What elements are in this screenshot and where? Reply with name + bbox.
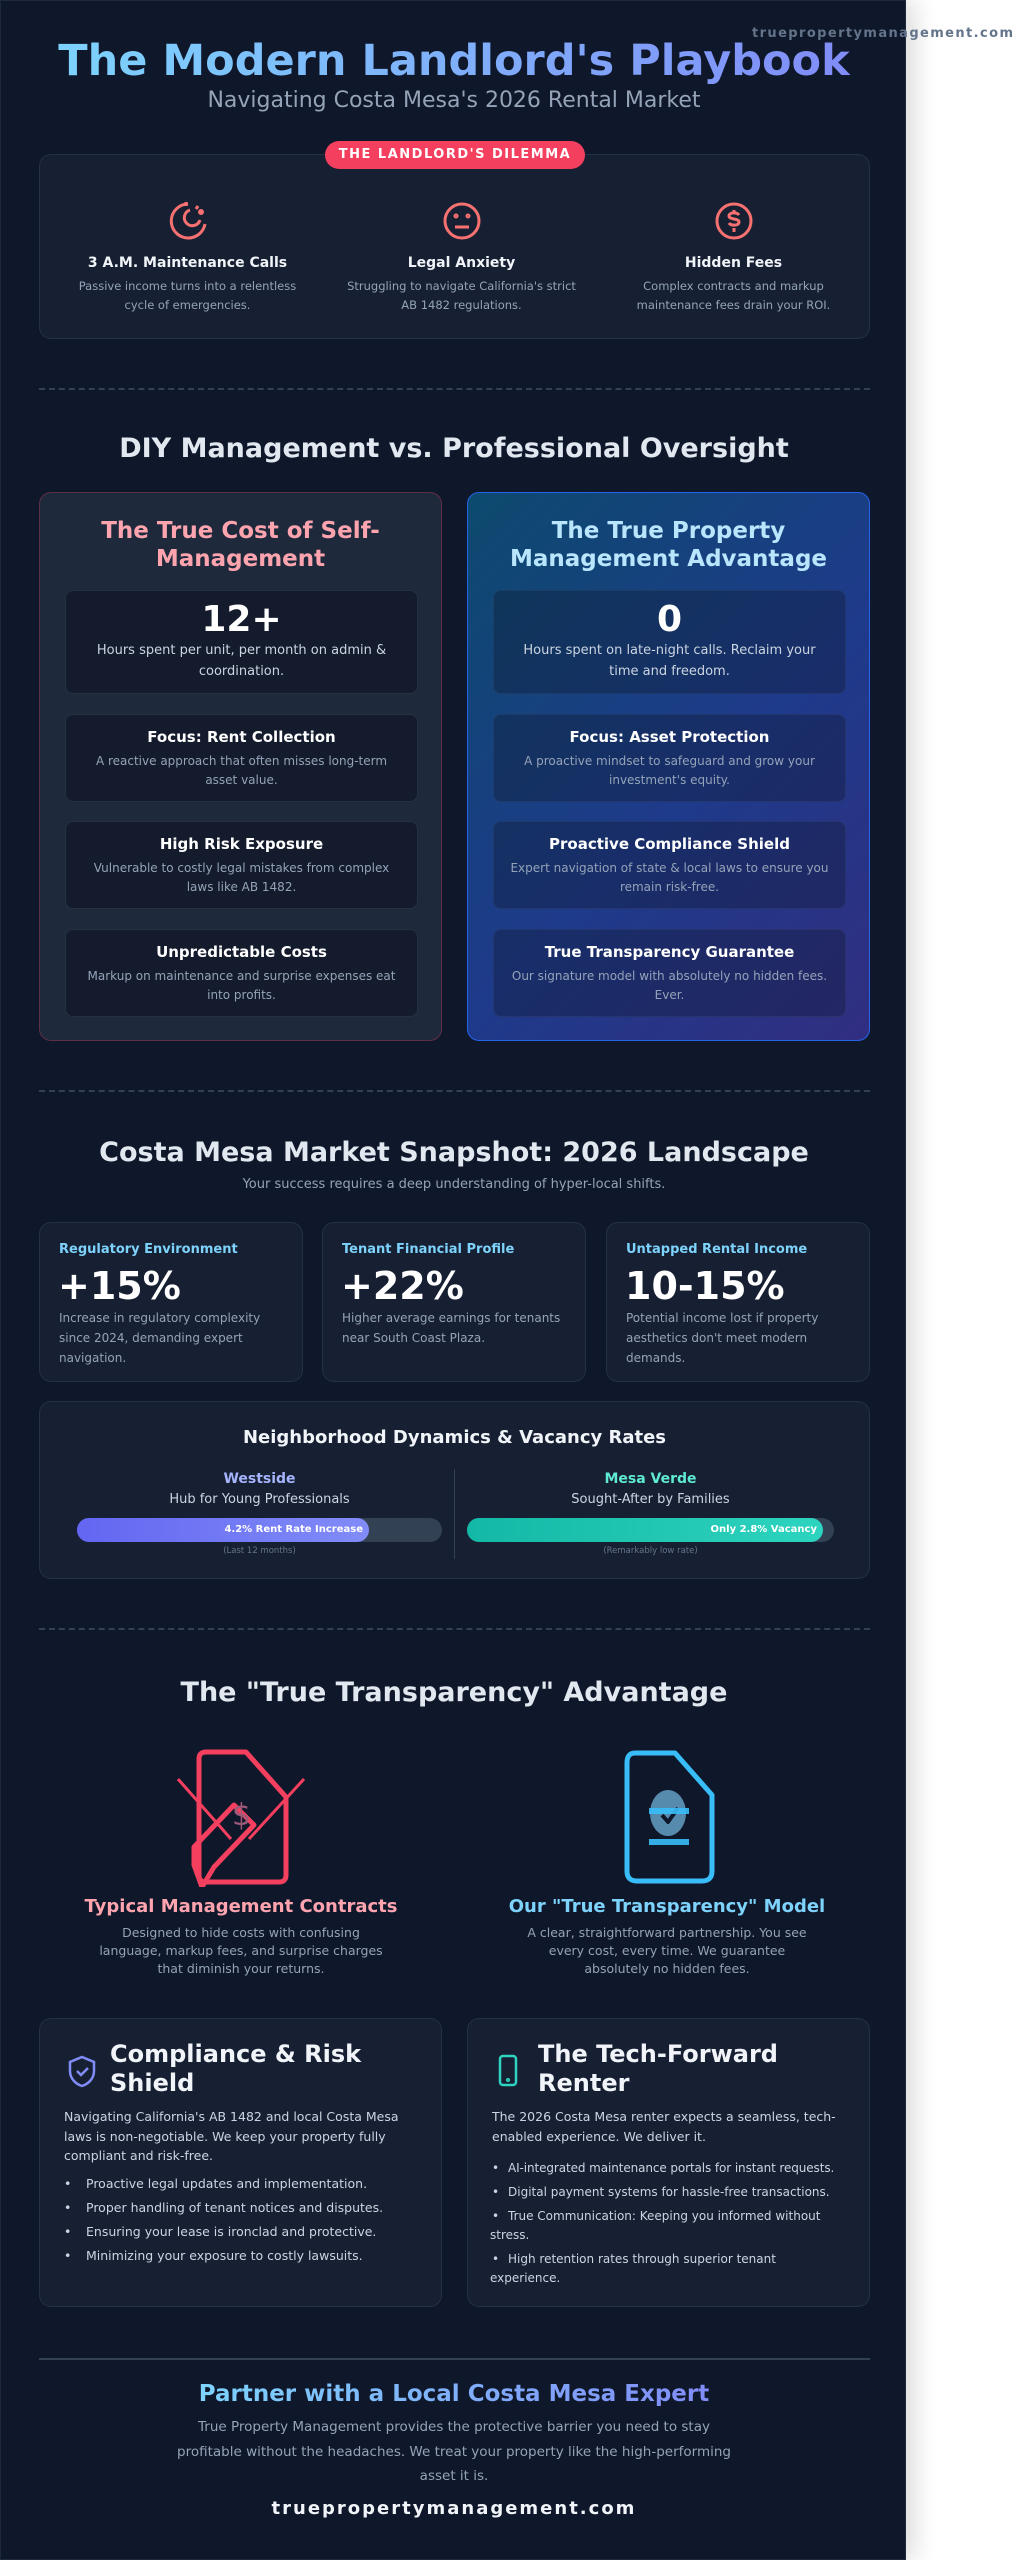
mesa verde bar: (Remarkably low rate)	[603, 1546, 698, 1556]
panel: neighborhood dynamics: Neighborhood Dynamics & Vacancy Rates	[243, 1427, 666, 1448]
panel: compliance & risk shield: Compliance & Risk	[110, 2040, 361, 2068]
item: asset protection: A proactive mindset to safeguard and grow your	[524, 754, 815, 768]
westside bar: Westside	[223, 1471, 296, 1487]
panel: compliance & risk shield: Ensuring your lease is ironclad and protective.	[86, 2224, 376, 2239]
card title: The True Property	[552, 518, 785, 544]
stat card: untapped income	[606, 1222, 870, 1382]
panel: tech-forward renter: •	[492, 2252, 499, 2266]
westside bar: (Last 12 months)	[223, 1546, 296, 1556]
stat card: regulatory: Regulatory Environment	[59, 1242, 238, 1257]
item: high risk: Vulnerable to costly legal mistakes from complex	[94, 861, 389, 875]
stat: 12+	[65, 590, 418, 694]
item: hidden fees: Hidden Fees	[685, 255, 782, 271]
card title	[510, 518, 827, 572]
item: maintenance	[79, 202, 296, 312]
panel: tech-forward renter: •	[492, 2161, 499, 2175]
block: true transparency model: A clear, straightforward partnership. You see	[527, 1925, 807, 1940]
item: transparency guarantee: Our signature model with absolutely no hidden fees.	[512, 969, 827, 983]
icon: crossed contract	[177, 1750, 305, 1887]
item: compliance shield	[493, 821, 846, 909]
stat: 0	[493, 590, 846, 694]
stat card: regulatory: +15%	[58, 1264, 181, 1308]
panel: tech-forward renter	[467, 2018, 870, 2307]
stat card: untapped income: Untapped Rental Income	[626, 1242, 807, 1257]
panel: true cost of self-management	[39, 492, 442, 1041]
mesa verde bar	[467, 1471, 834, 1556]
panel: tech-forward renter: experience.	[490, 2271, 560, 2285]
item: compliance shield: Expert navigation of state & local laws to ensure you	[510, 861, 829, 875]
panel: tech-forward renter: True Communication: Keeping you informed without stress.	[490, 2209, 820, 2242]
item: rent collection: asset value.	[205, 773, 278, 787]
panel: true property management advantage	[467, 492, 870, 1041]
panel: compliance & risk shield: •	[64, 2224, 71, 2239]
item: maintenance: 3 A.M. Maintenance Calls	[88, 255, 287, 271]
westside bar: Hub for Young Professionals	[169, 1492, 350, 1507]
item: compliance shield: Proactive Compliance Shield	[549, 835, 790, 853]
item: hidden fees: Complex contracts and markup	[643, 279, 824, 293]
item: legal anxiety: AB 1482 regulations.	[401, 298, 522, 312]
block: typical contracts	[84, 1896, 397, 1976]
block: true transparency model: absolutely no hidden fees.	[584, 1961, 750, 1976]
item: hidden fees: maintenance fees drain your ROI.	[637, 298, 830, 312]
stat card: regulatory: Increase in regulatory complexity since 2024, demanding expert navigation.	[59, 1311, 260, 1365]
item: maintenance: Passive income turns into a relentless	[79, 279, 296, 293]
westside bar: 4.2% Rent Rate Increase	[224, 1524, 363, 1535]
card title: Management Advantage	[510, 546, 827, 572]
item: unpredictable costs: into profits.	[207, 988, 276, 1002]
card title: The True Cost of Self-	[101, 518, 380, 544]
block: true transparency model: Our "True Transparency" Model	[509, 1896, 825, 1917]
block: typical contracts: Typical Management Contracts	[85, 1896, 397, 1917]
item: rent collection	[65, 714, 418, 802]
stat card: untapped income: Potential income lost if property aesthetics don't meet modern demands.	[626, 1311, 818, 1365]
panel: tech-forward renter: •	[492, 2209, 499, 2223]
icon: dollar coin	[716, 202, 752, 240]
icon: phone	[498, 2054, 518, 2086]
card title	[101, 518, 380, 572]
panel: neighborhood dynamics	[39, 1401, 870, 1579]
title: The Modern Landlord's Playbook	[58, 36, 850, 86]
stat card: tenant profile: +22%	[341, 1264, 464, 1308]
badge: THE LANDLORD'S DILEMMA	[339, 147, 571, 162]
block: true transparency model	[509, 1896, 825, 1976]
block: typical contracts: language, markup fees, and surprise charges	[99, 1943, 383, 1958]
panel: compliance & risk shield: Minimizing your exposure to costly lawsuits.	[86, 2248, 363, 2263]
panel: compliance & risk shield: •	[64, 2248, 71, 2263]
mesa verde bar: Only 2.8% Vacancy	[711, 1524, 817, 1535]
panel: tech-forward renter: AI-integrated maintenance portals for instant requests.	[508, 2161, 834, 2175]
panel: tech-forward renter: •	[492, 2185, 499, 2199]
stat card: tenant profile	[322, 1222, 586, 1382]
footer text: True Property Management provides the protective barrier you need to stay profitable without the headaches. We treat your property like the high-performing asset it is.	[177, 2419, 731, 2484]
item: transparency guarantee: True Transparency Guarantee	[545, 943, 794, 961]
stat card: tenant profile: Tenant Financial Profile	[342, 1242, 514, 1257]
item: unpredictable costs: Unpredictable Costs	[156, 943, 327, 961]
watermark: truepropertymanagement.com	[752, 26, 1014, 41]
item: legal anxiety: Struggling to navigate California's strict	[347, 279, 576, 293]
subheading: Your success requires a deep understanding of hyper-local shifts.	[243, 1177, 665, 1192]
stat card: tenant profile: Higher average earnings for tenants near South Coast Plaza.	[342, 1311, 560, 1345]
item: asset protection: Focus: Asset Protection	[570, 728, 769, 746]
stat: 0: 0	[657, 599, 682, 640]
panel: compliance & risk shield: Proactive legal updates and implementation.	[86, 2176, 367, 2191]
panel: compliance & risk shield: Shield	[110, 2069, 194, 2097]
item: asset protection	[493, 714, 846, 802]
icon: crossed contract: $	[232, 1798, 251, 1833]
item: compliance shield: remain risk-free.	[620, 880, 719, 894]
item: hidden fees	[637, 202, 830, 312]
panel: tech-forward renter: High retention rates through superior tenant	[508, 2252, 776, 2266]
panel: compliance & risk shield: Navigating California's AB 1482 and local Costa Mesa laws is non-negotiable. We keep your property fully compliant and risk-free.	[64, 2109, 399, 2163]
icon: transparent document	[624, 1750, 714, 1884]
icon: shield	[68, 2056, 96, 2088]
item: maintenance: cycle of emergencies.	[125, 298, 250, 312]
stat card: untapped income: 10-15%	[625, 1264, 785, 1308]
item: legal anxiety	[347, 202, 576, 312]
item: high risk: High Risk Exposure	[160, 835, 323, 853]
block: typical contracts: that diminish your returns.	[157, 1961, 324, 1976]
item: rent collection: Focus: Rent Collection	[147, 728, 336, 746]
heading: market snapshot: Costa Mesa Market Snapshot: 2026 Landscape	[99, 1137, 809, 1168]
stat: 12+: 12+	[201, 599, 282, 640]
item: transparency guarantee: Ever.	[655, 988, 684, 1002]
block: typical contracts: Designed to hide costs with confusing	[122, 1925, 360, 1940]
panel: tech-forward renter: The Tech-Forward	[538, 2040, 778, 2068]
panel: tech-forward renter: Renter	[538, 2069, 629, 2097]
panel: compliance & risk shield	[39, 2018, 442, 2307]
heading: DIY vs professional: DIY Management vs. Professional Oversight	[119, 433, 789, 464]
icon: neutral face	[444, 202, 480, 240]
card title: Management	[156, 546, 325, 572]
item: high risk: laws like AB 1482.	[187, 880, 296, 894]
subtitle: Navigating Costa Mesa's 2026 Rental Market	[207, 88, 701, 113]
mesa verde bar: Mesa Verde	[604, 1471, 697, 1487]
badge	[325, 141, 585, 169]
stat: 12+: Hours spent per unit, per month on admin &	[97, 643, 386, 658]
stat: 12+: coordination.	[199, 664, 284, 679]
item: transparency guarantee	[493, 929, 846, 1017]
heading: true transparency: The "True Transparency" Advantage	[181, 1677, 727, 1708]
item: rent collection: A reactive approach that often misses long-term	[96, 754, 387, 768]
footer url: truepropertymanagement.com	[272, 2498, 636, 2519]
footer heading: Partner with a Local Costa Mesa Expert	[199, 2381, 709, 2407]
block: true transparency model: every cost, every time. We guarantee	[549, 1943, 785, 1958]
panel: landlord's dilemma	[39, 154, 870, 339]
panel: compliance & risk shield: •	[64, 2200, 71, 2215]
panel: compliance & risk shield: •	[64, 2176, 71, 2191]
mesa verde bar: Sought-After by Families	[571, 1492, 730, 1507]
item: asset protection: investment's equity.	[609, 773, 730, 787]
item: unpredictable costs	[65, 929, 418, 1017]
stat: 0: Hours spent on late-night calls. Reclaim your	[523, 643, 816, 658]
panel: tech-forward renter: Digital payment systems for hassle-free transactions.	[508, 2185, 830, 2199]
stat: 0: time and freedom.	[609, 664, 730, 679]
panel: compliance & risk shield: Proper handling of tenant notices and disputes.	[86, 2200, 383, 2215]
westside bar	[77, 1471, 442, 1556]
item: high risk	[65, 821, 418, 909]
item: legal anxiety: Legal Anxiety	[408, 255, 515, 271]
stat card: regulatory	[39, 1222, 303, 1382]
item: unpredictable costs: Markup on maintenance and surprise expenses eat	[88, 969, 396, 983]
panel: tech-forward renter: The 2026 Costa Mesa renter expects a seamless, tech-enabled experience. We deliver it.	[492, 2109, 836, 2144]
icon: clock moon	[170, 202, 206, 240]
